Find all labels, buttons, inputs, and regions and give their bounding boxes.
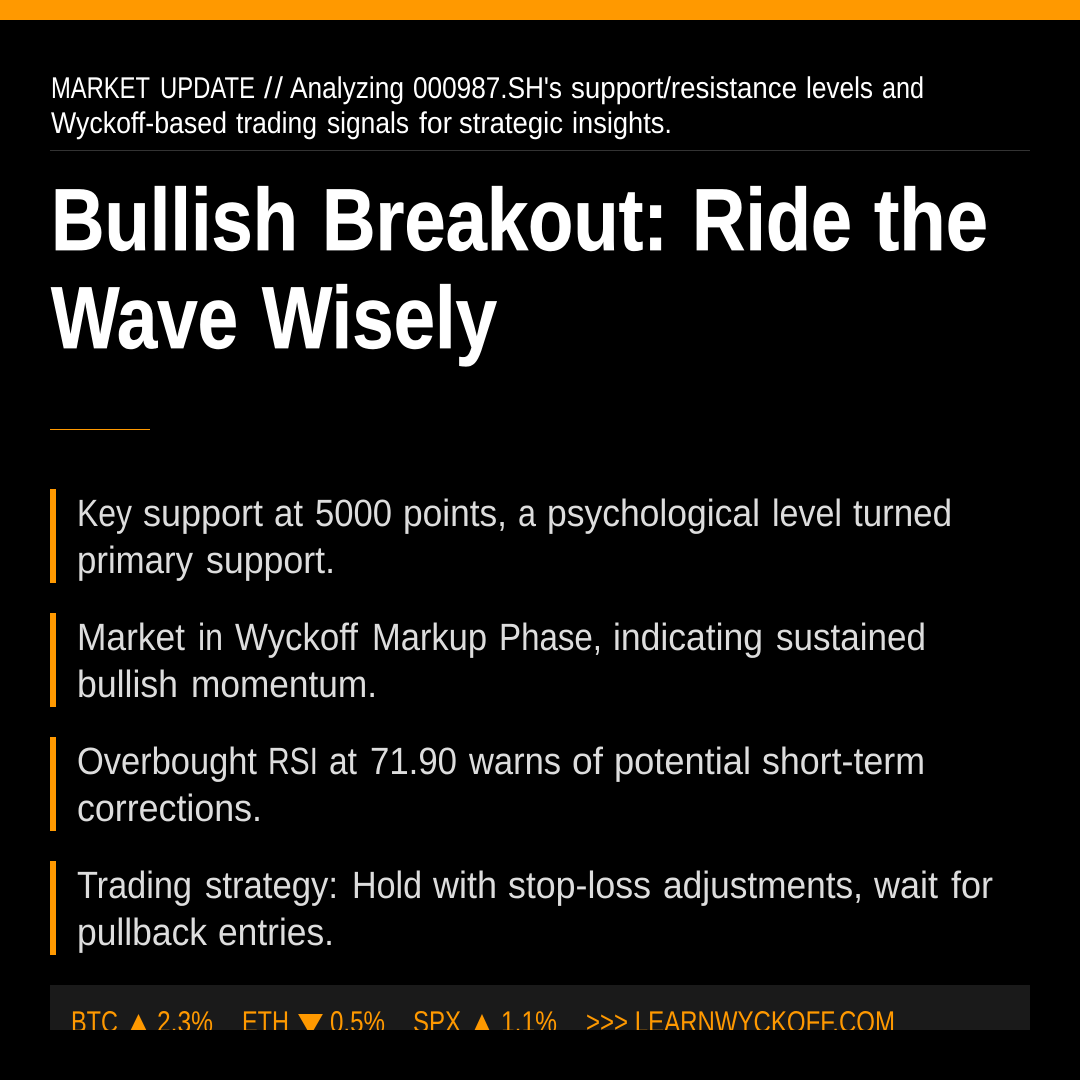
bullet: overbought RSI: at — [329, 741, 357, 783]
bullet: key support: points, — [403, 493, 507, 535]
bullet: trading strategy: for — [951, 865, 993, 907]
title: Wisely — [262, 268, 497, 367]
bullet: key support — [50, 489, 952, 583]
bullet: trading strategy: with — [432, 865, 497, 907]
bullet: overbought RSI — [50, 737, 925, 831]
bullet: markup phase: momentum. — [191, 664, 377, 706]
ticker strip: 0.5% — [330, 1006, 385, 1039]
market update subtitle: 000987.SH's — [413, 72, 562, 105]
market update subtitle: strategic — [459, 107, 563, 140]
bullet: key support: support — [143, 493, 263, 535]
ticker strip — [50, 985, 1030, 1030]
market update subtitle: UPDATE — [160, 72, 255, 105]
market update subtitle: for — [419, 107, 452, 140]
bullet: overbought RSI: warns — [468, 741, 561, 783]
bullet: trading strategy — [50, 861, 993, 955]
bullet: trading strategy: Hold — [352, 865, 422, 907]
bullet: key support: 5000 — [315, 493, 392, 535]
title — [51, 170, 988, 367]
bullet: key support: level — [772, 493, 842, 535]
ticker strip: ETH — [242, 1006, 289, 1039]
ticker strip: ▲ — [128, 1006, 149, 1039]
bullet: key support: at — [274, 493, 303, 535]
market update subtitle: levels — [806, 72, 873, 105]
bullet: overbought RSI: 71.90 — [370, 741, 457, 783]
bullet: key support: Key — [77, 493, 132, 535]
title: Wave — [51, 268, 238, 367]
bullet: markup phase: Markup — [372, 617, 487, 659]
market update subtitle: signals — [327, 107, 409, 140]
bullet: trading strategy: wait — [873, 865, 938, 907]
bullet: overbought RSI: Overbought — [77, 741, 257, 783]
short orange rule — [50, 429, 150, 430]
market update subtitle: support/resistance — [571, 72, 797, 105]
title: Ride — [692, 170, 852, 269]
ticker strip: >>> LEARNWYCKOFF.COM — [586, 1006, 895, 1039]
market update subtitle: Wyckoff-based — [51, 107, 227, 140]
bullet: markup phase: Market — [77, 617, 185, 659]
bullet: markup phase: indicating — [613, 617, 763, 659]
bullet: key support: primary — [77, 540, 193, 582]
market update subtitle: and — [882, 72, 924, 105]
bullet: key support: support. — [206, 540, 335, 582]
ticker strip: ▼ — [298, 1006, 324, 1039]
market update subtitle: MARKET — [51, 72, 150, 105]
ticker strip: 1.1% — [501, 1006, 557, 1039]
ticker strip: BTC — [71, 1006, 118, 1039]
market update subtitle: Analyzing — [290, 72, 404, 105]
bullet: overbought RSI: of — [572, 741, 603, 783]
bullet: trading strategy: entries. — [218, 912, 334, 954]
top accent bar — [0, 0, 1080, 20]
ticker strip: ▲ — [472, 1006, 492, 1039]
market update subtitle: trading — [236, 107, 317, 140]
bullet: overbought RSI: short-term — [762, 741, 925, 783]
market update subtitle: insights. — [572, 107, 672, 140]
bullet: trading strategy: adjustments, — [663, 865, 863, 907]
title: the — [874, 170, 988, 269]
bullet: markup phase — [50, 613, 926, 707]
bullet: overbought RSI: corrections. — [77, 788, 262, 830]
market update subtitle: // — [264, 72, 284, 105]
bullet: key support: a — [518, 493, 537, 535]
bullet: key support: turned — [853, 493, 952, 535]
bullet: markup phase: Wyckoff — [235, 617, 358, 659]
bullet: trading strategy: strategy: — [205, 865, 338, 907]
bullet: overbought RSI: RSI — [268, 741, 318, 783]
title: Bullish — [51, 170, 298, 269]
bullet: markup phase: in — [198, 617, 223, 659]
market update subtitle — [51, 72, 924, 140]
bullet: markup phase: bullish — [77, 664, 178, 706]
ticker strip: SPX — [413, 1006, 461, 1039]
bullet: trading strategy: Trading — [77, 865, 192, 907]
bullet: key support: psychological — [547, 493, 760, 535]
ticker strip: 2.3% — [157, 1006, 213, 1039]
bullet: markup phase: sustained — [776, 617, 926, 659]
bullet: trading strategy: stop-loss — [508, 865, 651, 907]
bullet: overbought RSI: potential — [614, 741, 751, 783]
title: Breakout: — [322, 170, 668, 269]
bullet: trading strategy: pullback — [77, 912, 208, 954]
bullet: markup phase: Phase, — [499, 617, 602, 659]
